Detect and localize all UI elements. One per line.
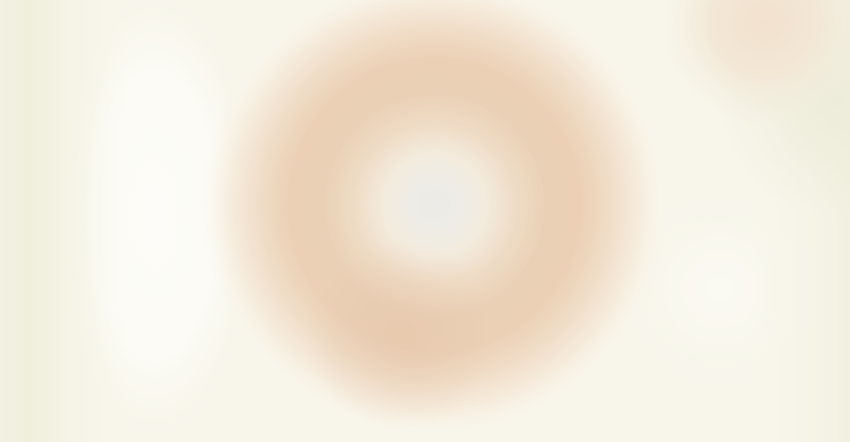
central peach ring bbox=[200, 0, 670, 440]
light area right bbox=[600, 170, 850, 410]
darker lower ring patch bbox=[300, 235, 500, 430]
peach corner blob bbox=[650, 0, 850, 130]
right corner shade bbox=[700, 0, 850, 230]
light area left bbox=[40, 0, 270, 442]
